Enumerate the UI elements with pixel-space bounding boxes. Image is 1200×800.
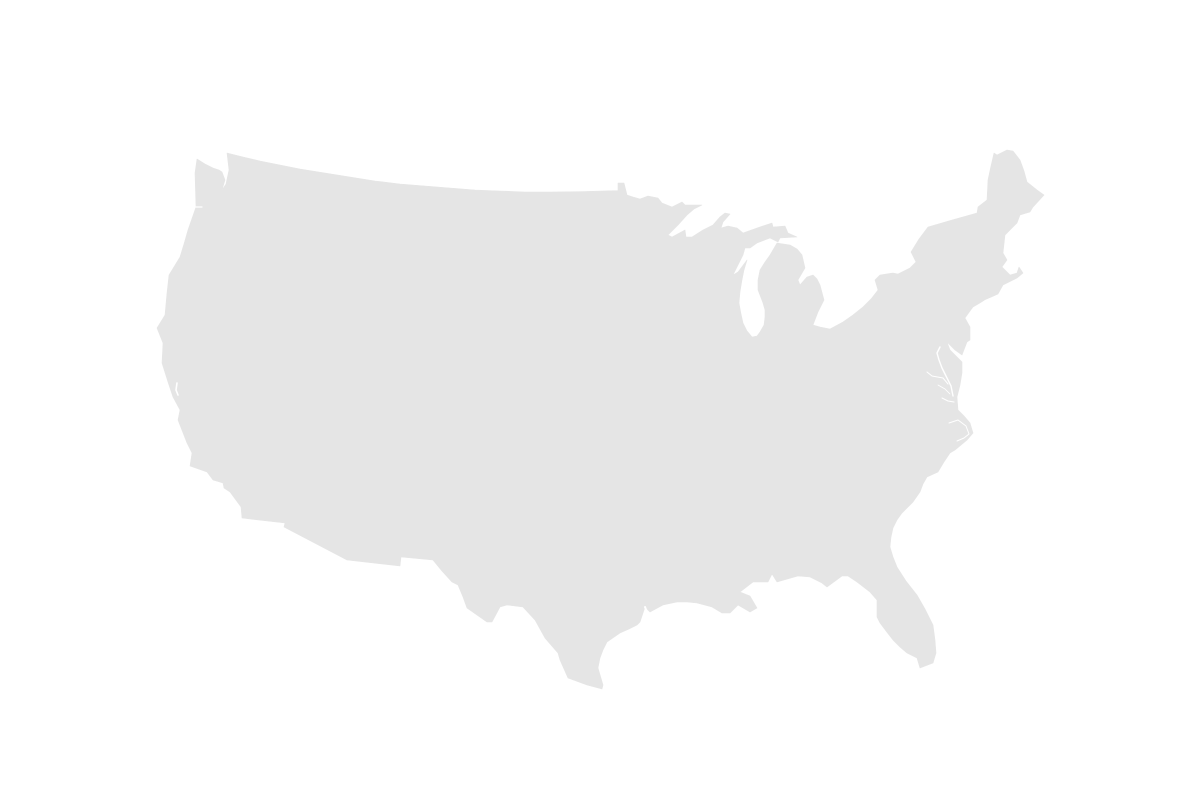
- Rappahannock River: [938, 385, 950, 394]
- land mass outline: [157, 150, 1044, 689]
- Columbia River mouth: [196, 206, 202, 208]
- Galveston Bay: [645, 607, 647, 612]
- Long Island Sound: [967, 295, 997, 316]
- Potomac River: [927, 372, 948, 384]
- San Francisco Bay: [176, 383, 178, 395]
- Pamlico Sound: [949, 420, 969, 441]
- James River: [942, 398, 954, 402]
- water inlets: sounds and bays: [176, 207, 997, 612]
- Chesapeake Bay: [937, 347, 953, 396]
